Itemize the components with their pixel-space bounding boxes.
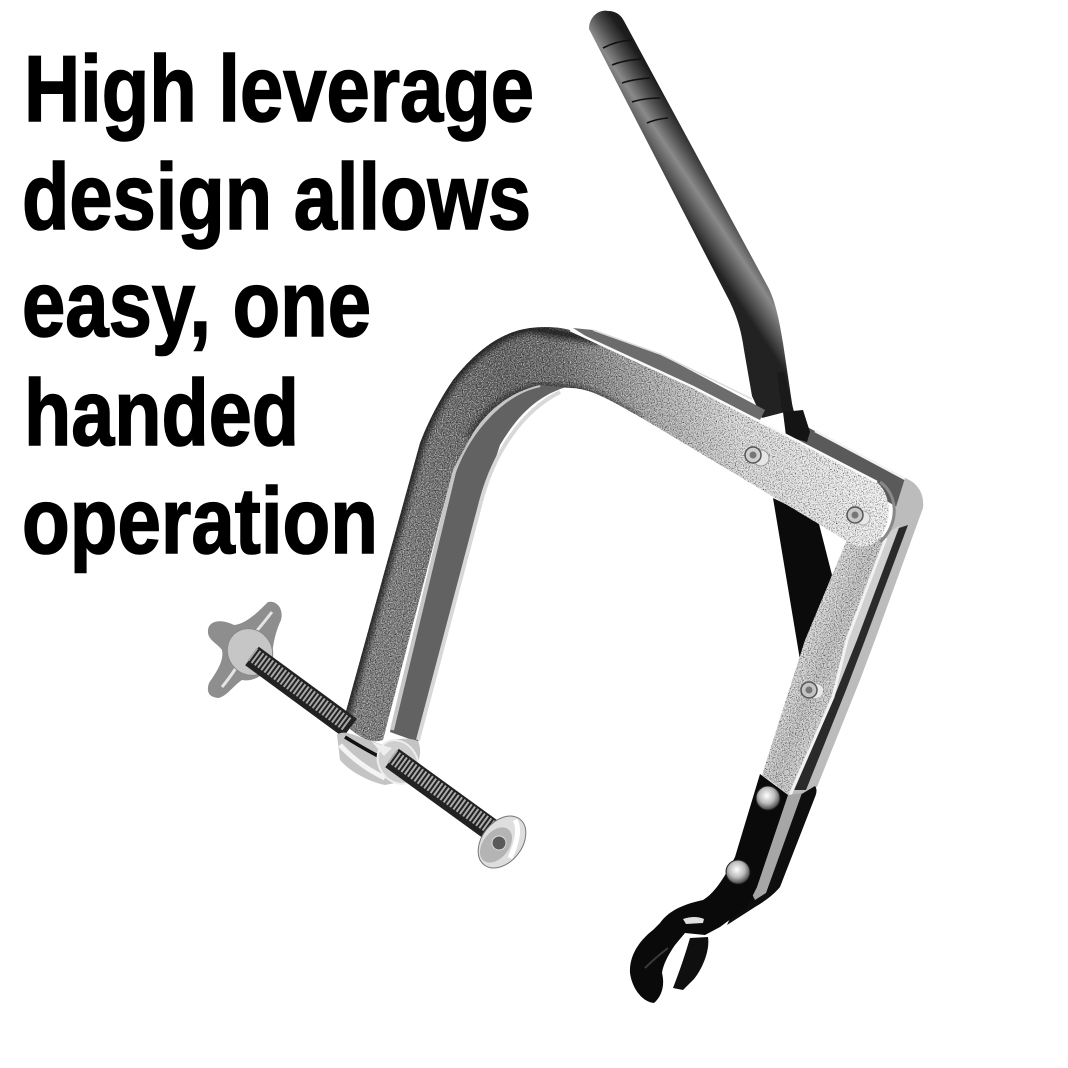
threaded rod, head side [392, 756, 494, 832]
black handle with grip rings [589, 11, 794, 418]
jaw rivet (upper) [756, 786, 780, 810]
chrome collar [337, 732, 427, 792]
arm screw [801, 682, 823, 698]
headline: High leverage design allows easy, one handed operation: operation [22, 468, 378, 573]
chrome bolt head [468, 807, 536, 877]
rear clamp bar [390, 328, 923, 742]
bar pivot screw (upper) [745, 447, 769, 466]
lower lever arm [762, 478, 923, 800]
headline: High leverage design allows easy, one handed operation: High leverage [24, 36, 534, 141]
headline: High leverage design allows easy, one handed operation: design allows [22, 144, 531, 249]
front clamp bar with pivot end [343, 327, 894, 741]
black lever wedge behind joint [773, 498, 832, 660]
threaded rod, knob side [252, 654, 350, 728]
bar pivot screw (lower) [847, 507, 870, 525]
headline: High leverage design allows easy, one handed operation: easy, one [22, 251, 371, 356]
silver arm lower strip [750, 793, 802, 900]
headline: High leverage design allows easy, one handed operation [22, 36, 534, 573]
headline: High leverage design allows easy, one handed operation: handed [24, 360, 299, 465]
black hooked jaw [630, 774, 788, 1003]
black rear jaw plate [727, 786, 816, 925]
jaw rivet (lower) [726, 860, 750, 884]
star knob [208, 602, 282, 698]
